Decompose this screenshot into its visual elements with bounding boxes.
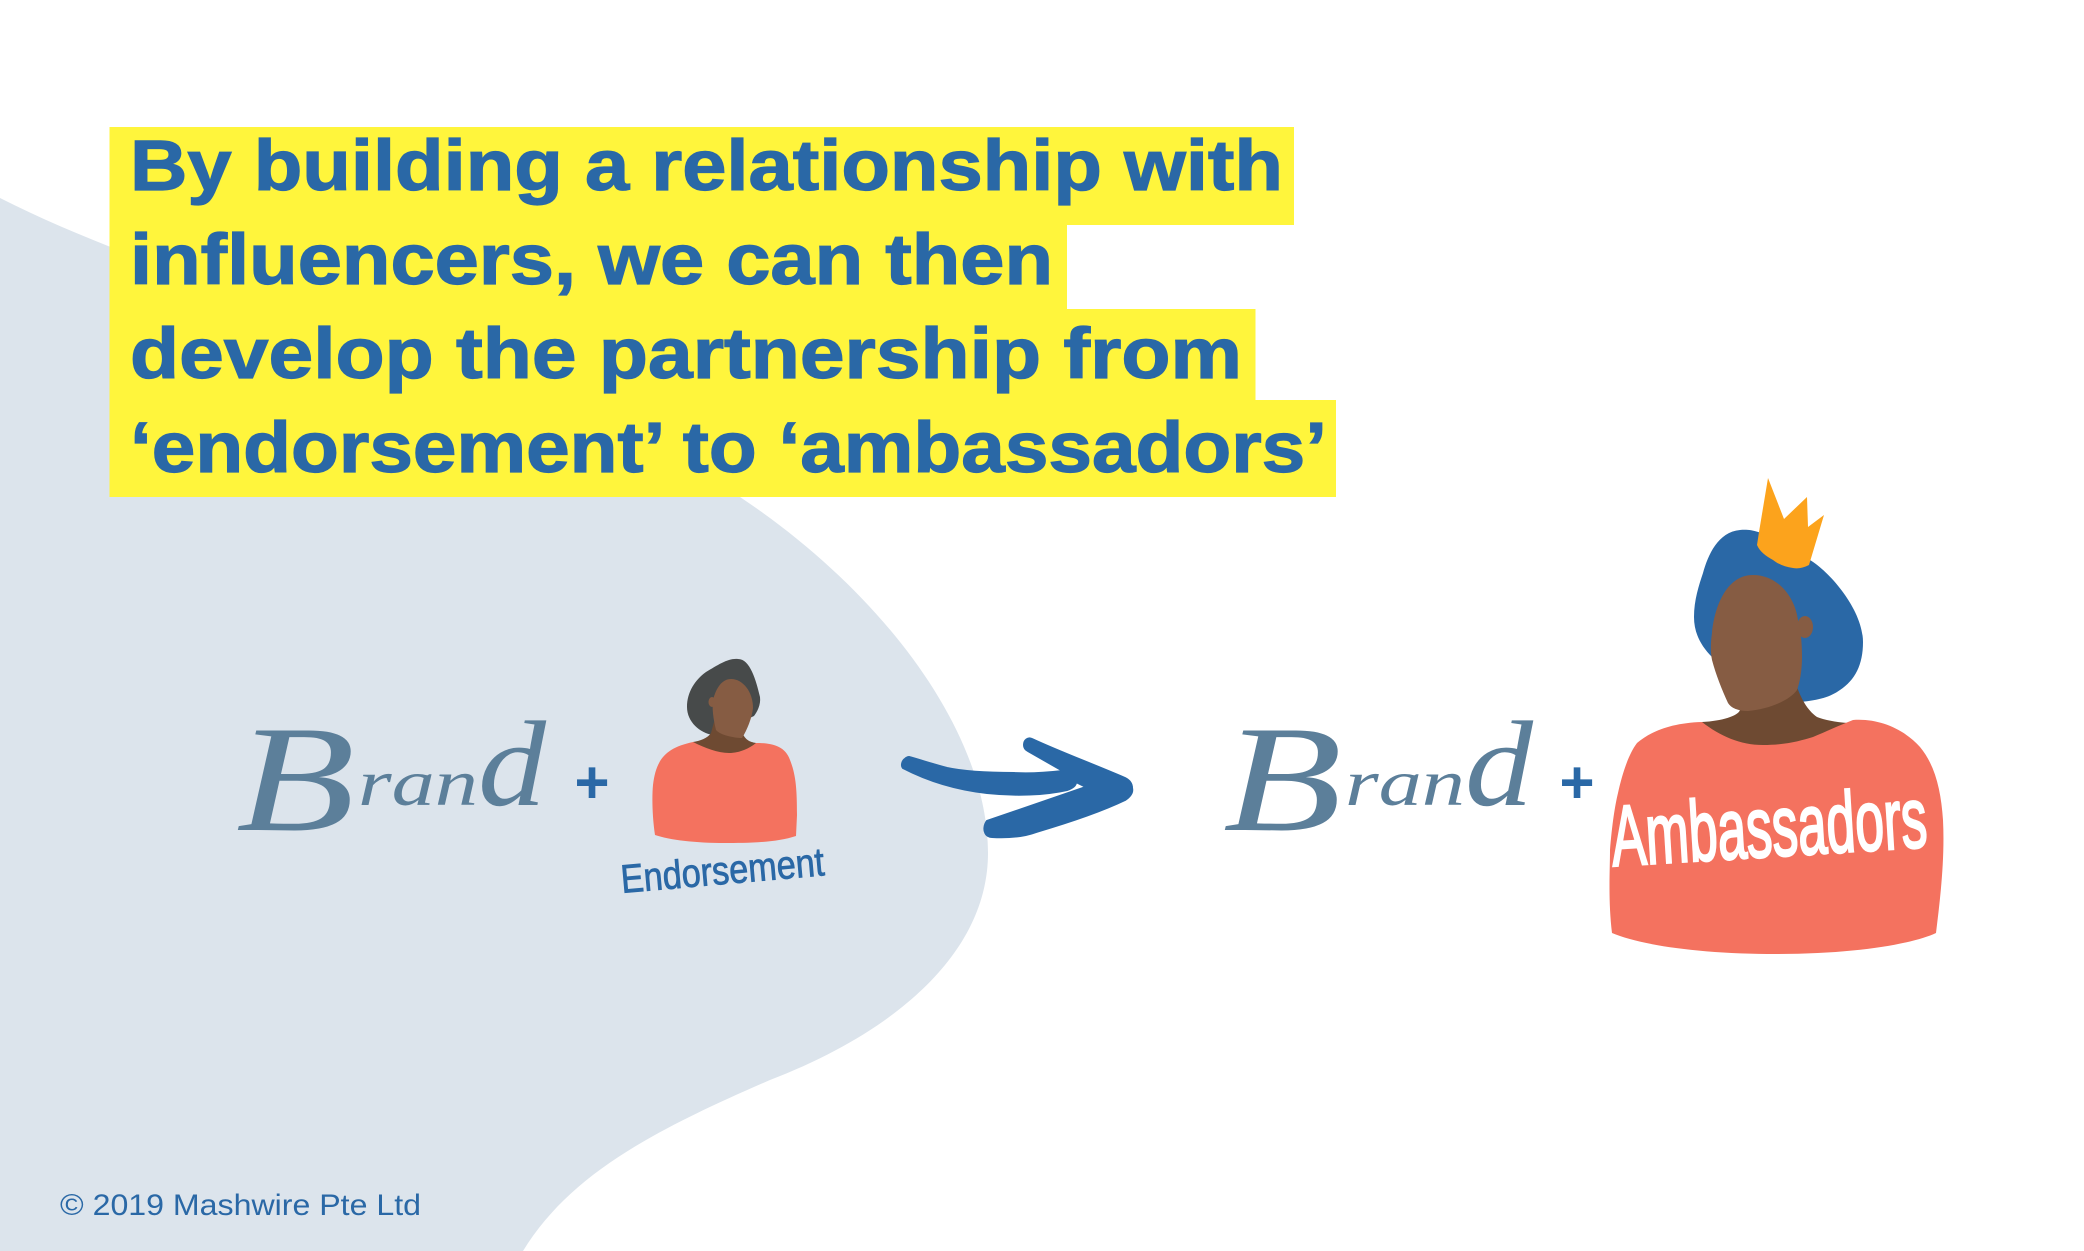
- sweater: [652, 742, 797, 843]
- ambassador person: [1608, 478, 1943, 954]
- neck: [693, 722, 756, 765]
- brand script word: d: [478, 697, 547, 832]
- headline with yellow highlight: [110, 127, 1336, 497]
- plus sign: +: [574, 749, 610, 816]
- brand script word: d: [1465, 697, 1534, 832]
- headline text: By building a relationship with: [130, 127, 1283, 206]
- hair: [1694, 530, 1863, 702]
- brand script word: ran: [1345, 747, 1465, 820]
- left group: brand plus endorsement: [236, 659, 826, 902]
- arrow: [902, 738, 1132, 837]
- right group: brand plus ambassadors: [1223, 478, 1943, 954]
- headline text: develop the partnership from: [130, 315, 1242, 394]
- brand script word: B: [236, 695, 355, 863]
- headline text: influencers, we can then: [130, 221, 1053, 300]
- yellow highlight bars: [110, 127, 1336, 497]
- brand script word: ran: [358, 747, 478, 820]
- hair: [687, 659, 760, 735]
- face: [713, 679, 753, 738]
- ear: [1797, 616, 1813, 638]
- endorsement person: [652, 659, 797, 843]
- crown: [1757, 478, 1824, 568]
- face: [1711, 575, 1802, 711]
- plus sign: +: [1559, 749, 1595, 816]
- neck: [1702, 687, 1848, 765]
- ear: [708, 697, 716, 707]
- sweater: [1610, 720, 1943, 954]
- headline text: ‘endorsement’ to ‘ambassadors’: [130, 409, 1327, 488]
- background blob: [0, 198, 988, 1251]
- copyright footer: © 2019 Mashwire Pte Ltd: [60, 1189, 421, 1222]
- brand script word: B: [1223, 695, 1342, 863]
- headline text: [130, 127, 1327, 488]
- endorsement label: Endorsement: [619, 840, 826, 902]
